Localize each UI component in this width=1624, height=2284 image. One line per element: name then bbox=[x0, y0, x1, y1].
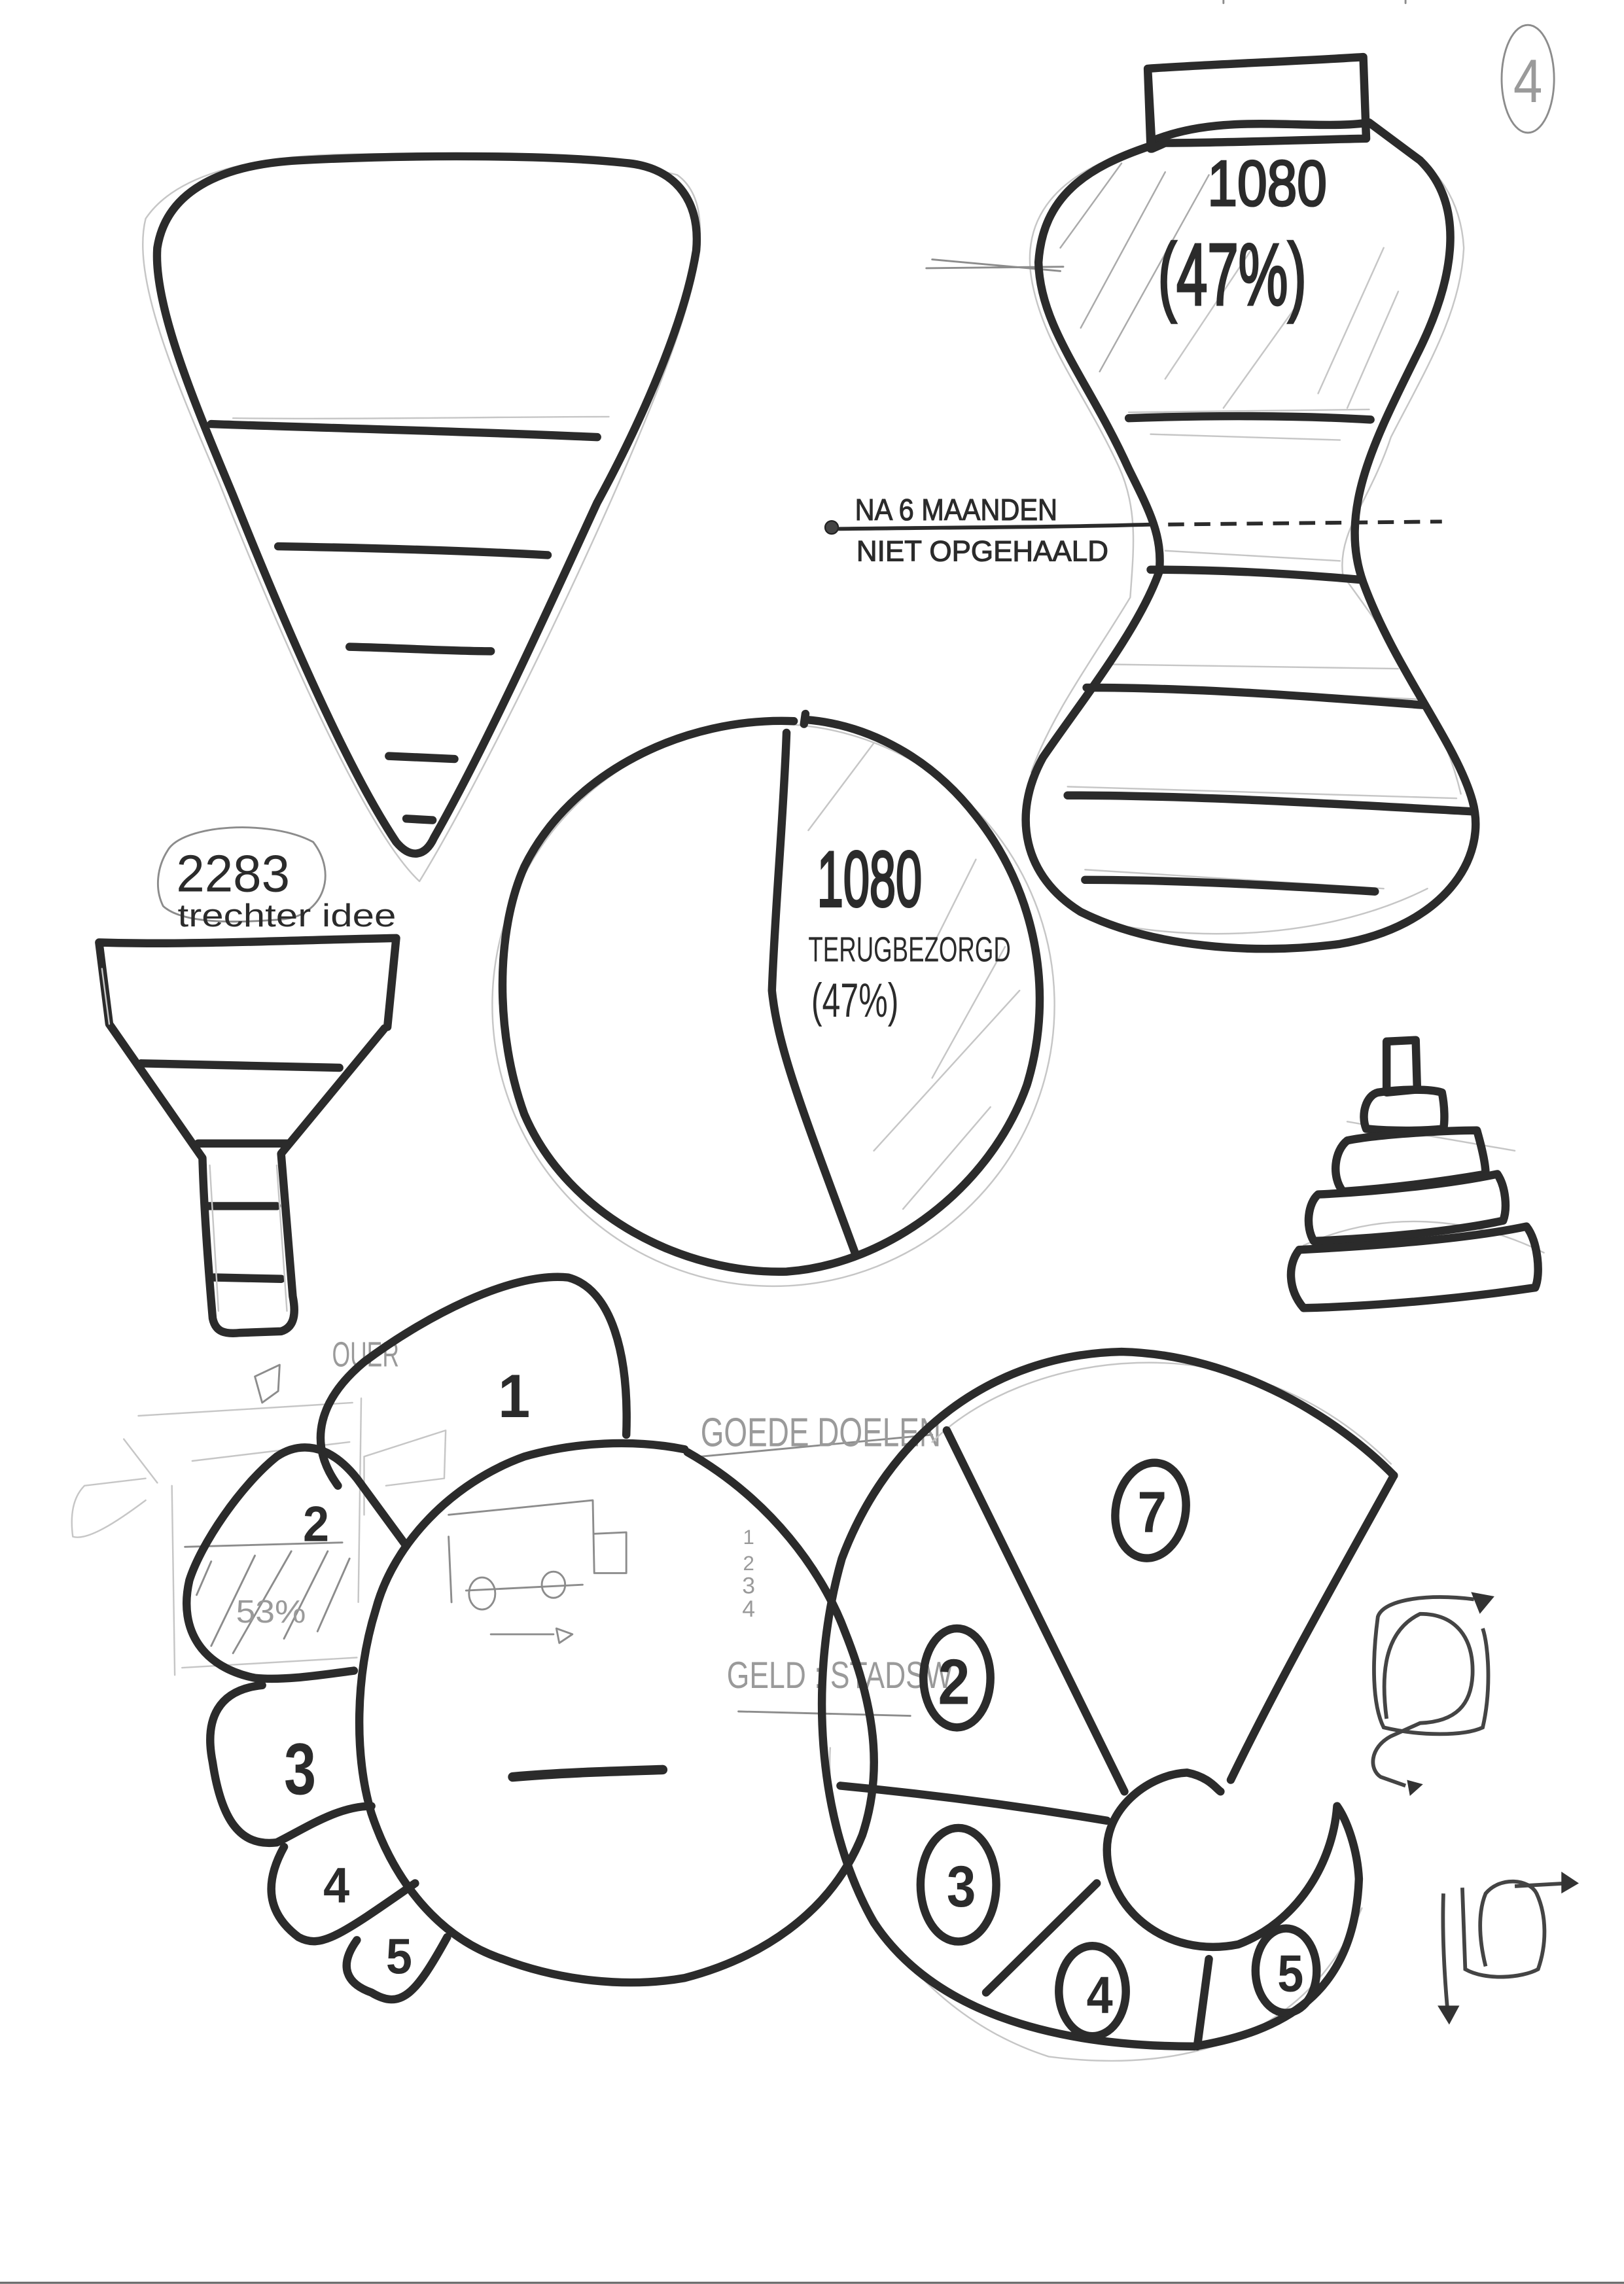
left chart pencil underdrawing: 2 bbox=[743, 1552, 754, 1575]
right radial pie bbox=[822, 1352, 1394, 2061]
segment label 3: 3 bbox=[947, 1854, 976, 1919]
funnel caption bbox=[158, 828, 396, 934]
pie shading bbox=[808, 743, 1019, 1209]
icon: curl arrow bottom bbox=[1438, 1872, 1579, 2024]
small funnel bbox=[99, 828, 396, 1333]
icon: curl arrow top bbox=[1373, 1592, 1494, 1796]
left chart pencil underdrawing bbox=[72, 1335, 953, 1716]
petal 1: 1 bbox=[498, 1362, 530, 1430]
left chart pencil underdrawing: 4 bbox=[742, 1596, 755, 1622]
segment label 7 bbox=[1108, 1457, 1193, 1564]
segment label 7: 7 bbox=[1138, 1479, 1167, 1545]
left chart pencil underdrawing: 3 bbox=[742, 1573, 755, 1599]
petal 4 bbox=[272, 1847, 415, 1941]
left chart pencil underdrawing: OUER bbox=[332, 1335, 399, 1374]
hourglass value bbox=[1158, 147, 1327, 324]
hourglass value: (47%) bbox=[1158, 226, 1307, 324]
hatched area 53 percent: 53% bbox=[236, 1594, 306, 1630]
hatched area 53 percent bbox=[185, 1543, 349, 1653]
left chart pencil underdrawing: GOEDE DOELEN bbox=[701, 1411, 941, 1456]
six months annotation: NA 6 MAANDEN bbox=[855, 493, 1057, 527]
segment label 4 bbox=[1059, 1946, 1126, 2036]
six months annotation: NIET OPGEHAALD bbox=[856, 535, 1108, 567]
hourglass value: 1080 bbox=[1207, 147, 1327, 219]
petal 4: 4 bbox=[323, 1857, 349, 1913]
pie label: 1080 bbox=[817, 835, 922, 923]
hourglass lid bbox=[1148, 57, 1366, 149]
segment label 3 bbox=[921, 1828, 997, 1942]
pie label: TERUGBEZORGD bbox=[808, 930, 1011, 969]
left chart pencil underdrawing: GELD : STADSW bbox=[727, 1655, 953, 1696]
pie label bbox=[808, 835, 1011, 1027]
petal 1 bbox=[321, 1277, 627, 1486]
segment label 2 bbox=[923, 1628, 991, 1727]
top edge marks bbox=[1224, 0, 1405, 3]
segment label 5 bbox=[1256, 1929, 1316, 2013]
six months annotation bbox=[825, 493, 1442, 567]
segment label 2: 2 bbox=[938, 1646, 970, 1718]
bottom scan edge bbox=[0, 2282, 1624, 2284]
petal 5: 5 bbox=[386, 1929, 412, 1985]
hourglass dividers bbox=[1068, 416, 1471, 892]
pie label: (47%) bbox=[811, 974, 898, 1027]
funnel caption: trechter idee bbox=[178, 898, 396, 934]
pie chart bbox=[492, 714, 1055, 1286]
page number: 4 bbox=[1513, 46, 1542, 115]
hourglass pencil underdrawing bbox=[927, 146, 1464, 934]
pie slice divider bbox=[772, 733, 855, 1253]
petal 2: 2 bbox=[303, 1496, 329, 1552]
page number bbox=[1502, 25, 1554, 133]
left radial chart bbox=[72, 1277, 953, 1999]
hourglass chart bbox=[825, 57, 1475, 949]
segment label 4: 4 bbox=[1087, 1965, 1113, 2024]
petal 3: 3 bbox=[284, 1729, 316, 1810]
segment label 5: 5 bbox=[1277, 1943, 1303, 2002]
petal 3 bbox=[210, 1685, 372, 1843]
left chart pencil underdrawing: 1 bbox=[743, 1526, 754, 1549]
centre circle bbox=[359, 1443, 874, 1982]
stacked pyramid bbox=[1291, 1040, 1544, 1308]
petal 5 bbox=[347, 1929, 447, 1999]
petal 2 bbox=[186, 1447, 405, 1679]
funnel caption: 2283 bbox=[176, 844, 290, 903]
cone funnel chart bbox=[143, 154, 700, 881]
